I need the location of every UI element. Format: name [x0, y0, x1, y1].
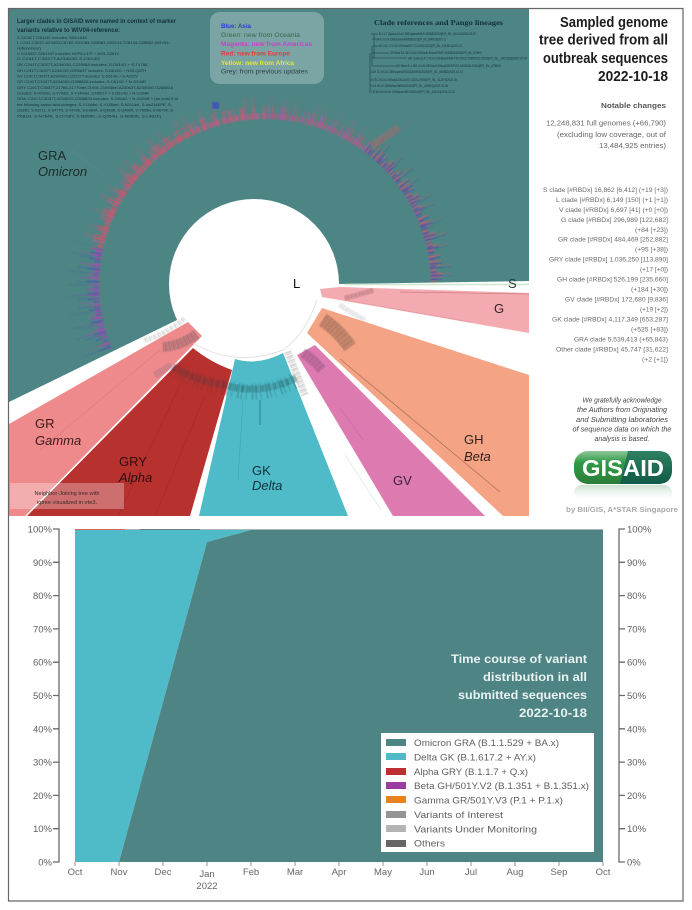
spikes: lower left blue and magenta [69, 247, 112, 356]
chart title [451, 652, 587, 720]
clade definitions text: the following amino acid changes: S-Y144del, S-Y145del, S-N211del, S-Ins214EPE, S- [17, 102, 173, 107]
right y axis: 30% [627, 758, 647, 769]
clade definitions text: variants relative to WIV04-reference: [17, 27, 120, 34]
clade counts list [543, 187, 668, 364]
clade definitions text: P681H, S-N764K, S-D796Y, S-N856K, S-Q954H, S-N969K, S-L981F) [17, 114, 162, 118]
sidebar title: outbreak sequences [543, 50, 668, 67]
geography colour legend: Green: new from Oceania [221, 32, 300, 39]
clade definitions text: GH C241T,C3037T,A23403G,G25563T includes: S-D614G + NS3-Q57H [17, 68, 146, 73]
right y axis: 10% [627, 824, 647, 835]
clade references mini tree: GH B.1 hCoV-19/England/20102000906/2020|EPI_ISL_660882|2020-10-19 [372, 70, 463, 74]
stacked area: Omicron GRA [119, 530, 603, 862]
clade definitions text: L C241,C3037,A23403,C8782,G11083,G25563,G26144,T28144,G28882 (WIV04- [17, 40, 171, 45]
GRY wedge [27, 348, 232, 516]
left y axis: 50% [33, 691, 53, 702]
legend: Delta GK (B.1.617.2 + AY.x) [414, 752, 536, 764]
x axis months: Nov [111, 867, 128, 878]
sidebar title: Sampled genome [560, 14, 668, 31]
clade references mini tree: GH Beta B.1.351 hCoV-19/South Africa/KRISP-EC-K005321/2020|EPI_ISL_678615 [396, 64, 501, 68]
wedge dark sequence fuzz [145, 290, 374, 395]
clade counts list: GV clade [#RBDx] 172,680 [9,836] [565, 296, 668, 304]
x axis months: Apr [332, 867, 346, 878]
label: GR Gamma: GR [35, 416, 54, 431]
x axis months: Dec [155, 867, 172, 878]
clade counts list: GRY clade [#RBDx] 1,036,250 [113,890] [549, 256, 668, 264]
clade counts list: (+84 [+23]) [635, 227, 668, 234]
left y axis [28, 524, 59, 868]
right y axis: 0% [627, 858, 641, 868]
clade counts list: (+184 [+30]) [631, 286, 668, 294]
GH wedge [307, 308, 529, 516]
right y axis: 100% [627, 524, 652, 536]
label: GRA Omicron: GRA [38, 148, 66, 163]
sidebar title [539, 14, 668, 85]
legend: Beta GH/501Y.V2 (B.1.351 + B.1.351.x) [414, 781, 589, 792]
left y axis: 100% [28, 524, 53, 536]
left y axis: 80% [33, 591, 53, 602]
x axis months: 2022 [196, 881, 218, 892]
clade definitions text: G C241T,C3037T,A23403G S-D614G [17, 56, 100, 61]
right y axis: 90% [627, 558, 647, 569]
thin top strips for remaining variants [75, 529, 603, 530]
clade counts list: GR clade [#RBDx] 484,469 [252,882] [558, 236, 668, 244]
S clade strip [345, 284, 529, 286]
left y axis: 40% [33, 724, 53, 735]
blue cluster at top [212, 102, 219, 109]
left y axis: 20% [33, 791, 53, 802]
clade definitions text [17, 18, 179, 118]
clade references mini tree: GRA.1 hCoV-19/Botswana/R40B58/2021|EPI_ISL_6640916|2021-11 [376, 38, 446, 42]
notable changes heading: Notable changes [601, 101, 666, 110]
wedge detail lines [40, 292, 529, 516]
spikes: right red and blue [364, 138, 453, 282]
left y axis: 90% [33, 558, 53, 569]
x axis months: Feb [243, 867, 259, 878]
label: GRY Alpha: Alpha [118, 470, 152, 485]
clade definitions text: G339D, S-S371L, S-S477N, S-T478K, S-E484A, S-Q493R, S-Q498R, S-Y505H, S-N679K, S- [17, 108, 175, 112]
right y axis: 20% [627, 791, 647, 802]
x axis months: May [374, 867, 392, 878]
G wedge [320, 287, 529, 333]
clade counts list: L clade [#RBDx] 6,149 [150] (+1 [+1]) [556, 197, 668, 204]
x axis months: Jan [199, 869, 215, 880]
right y axis: 40% [627, 724, 647, 735]
clade definitions text: GV C241T,C3037T,A23403G,C22227T includes: S-D614G + S-A222V [17, 74, 138, 78]
clade counts list: GK clade [#RBDx] 4,117,349 [653,287] [552, 316, 668, 324]
chart title: Time course of variant [451, 652, 587, 666]
legend: Variants Under Monitoring [414, 824, 537, 836]
clade references mini tree: V A hCoV-19/Wuhan/WH04/2020|EPI_ISL_406801|2020-01-05 [372, 84, 448, 88]
clade counts list: GRA clade 5,539,413 (+65,843) [574, 336, 668, 344]
clade counts list: (+95 [+38]) [635, 246, 668, 254]
geography colour legend: Blue: Asia [221, 23, 251, 30]
clade definitions text: GRY C241T,C3037T,21765-21770del,21991-21993del,A23063T,A23403G,G28882A [17, 85, 173, 90]
spikes: top red [188, 97, 266, 136]
label: L: L [293, 276, 300, 291]
clade definitions text: includes: S-H69del, S-V70del, S-Y144del, S-N501Y + S-D614G + N-G204R [17, 90, 149, 96]
chart title: submitted sequences [458, 688, 587, 702]
left y axis: 60% [33, 658, 53, 669]
sidebar title: 2022-10-18 [598, 68, 668, 85]
x axis months: Jun [419, 867, 435, 878]
clade counts list: (+17 [+0]) [640, 266, 668, 274]
legend: Variants of Interest [414, 810, 503, 821]
clade counts list: (+19 [+2]) [640, 306, 668, 314]
acknowledgement: We gratefully acknowledge [582, 396, 662, 404]
clade references mini tree: GR Gamma P.1 hCoV-19/Brazil/AM-FIOCRUZ-20890261/2020|EPI_ISL_1402366|2020-12-04 [408, 56, 527, 60]
GISAID logo: GISAID [582, 455, 664, 481]
legend: Omicron GRA (B.1.1.529 + BA.x) [414, 738, 559, 749]
GK wedge [199, 353, 348, 516]
stacked area: Delta GK [75, 530, 251, 862]
clade counts list: S clade [#RBDx] 16,862 [6,412] (+19 [+3]) [543, 187, 668, 194]
clade counts list: (+525 [+83]) [631, 326, 668, 334]
clade references mini tree [369, 19, 527, 94]
GRA Omicron teal background [9, 9, 529, 402]
GV wedge [297, 345, 485, 516]
clade references mini tree: G B.1 hCoV-19/Italy/LOM-ASST-CDG1/2020|EPI_ISL_412973|2020-02 [372, 78, 457, 82]
clade references mini tree: L B WIV04 hCoV-19/Wuhan/WIV04/2019|EPI_ISL_402124|2019-12-30 [371, 90, 455, 94]
right y axis: 70% [627, 624, 647, 635]
totals text: 13,484,925 entries) [599, 141, 666, 150]
label: GRA Omicron: Omicron [38, 164, 87, 179]
acknowledgement [572, 396, 672, 443]
right y axis [619, 524, 652, 868]
left y axis: 30% [33, 758, 53, 769]
clade definitions text: Larger clades in GISAID were named in context of marker [17, 18, 177, 25]
geography colour legend [210, 12, 324, 84]
clade references mini tree: GR Beta B.1.351 hCoV-19/South Africa/KRISP-K005325/2020|EPI_ISL_678597 [390, 51, 482, 55]
GRA tree radial spikes [69, 97, 453, 356]
clade counts list: G clade [#RBDx] 296,989 [122,682] [561, 217, 668, 224]
right y axis: 80% [627, 591, 647, 602]
spikes: upper right magenta [264, 97, 371, 152]
label: G: G [494, 301, 504, 316]
label: GV: GV [393, 473, 412, 488]
clade counts list: (+2 [+1]) [642, 356, 668, 364]
spike cluster at upper right [372, 128, 398, 146]
chart title: distribution in all [483, 670, 587, 684]
legend: Alpha GRY (B.1.1.7 + Q.x) [414, 767, 528, 778]
chart title: 2022-10-18 [519, 706, 587, 720]
legend: Others [414, 838, 445, 850]
x axis months: Aug [507, 867, 523, 878]
clade references mini tree: B.1.1.7 (Alpha) hCoV-19/England/MILK-9E05B3/2020|EPI_ISL_601443|2020-09-20 [379, 32, 476, 36]
acknowledgement: of sequence data on which the [572, 424, 672, 434]
totals text: (excluding low coverage, out of [557, 130, 666, 139]
sidebar title: tree derived from all [539, 32, 668, 48]
centre white circle [169, 199, 339, 369]
label: GH Beta: Beta [464, 449, 491, 464]
panel: phylogenetic tree [9, 9, 529, 516]
clade definitions text: GK C241T,C3037T,A23403G,C22995A includes: S-D614G + S-T478K [17, 62, 148, 67]
label: GK Delta: Delta [252, 478, 282, 493]
clade references mini tree: B.1.617.2 hCoV-19/India/GCT-GJ-0001/2021|EPI_ISL_1544014|2021-02 [380, 44, 462, 48]
label: GRY Alpha: GRY [119, 454, 147, 469]
geography colour legend: Yellow: new from Africa [221, 60, 294, 67]
geography colour legend: Red: new from Europe [221, 50, 290, 58]
note: tree method: Neighbor-Joining tree with [35, 491, 99, 497]
acknowledgement: analysis is based. [594, 434, 650, 443]
x axis months: Mar [287, 867, 303, 878]
panel: variant time course chart [28, 524, 652, 892]
geography colour legend: Magenta: new from Americas [221, 41, 312, 48]
label: GH Beta: GH [464, 432, 484, 447]
GISAID logo [574, 451, 672, 502]
clade counts list: V clade [#RBDx] 6,697 [41] (+0 [+0]) [559, 207, 668, 214]
clade counts list: GH clade [#RBDx] 526,199 [235,660] [557, 276, 668, 284]
x axis months [68, 862, 611, 892]
panel: notes sidebar [539, 14, 678, 514]
x axis months: Sep [551, 867, 567, 878]
clade counts list: Other clade [#RBDx] 45,747 [31,622] [556, 346, 668, 354]
note: tree method: iqtree visualized in ete3. [37, 500, 97, 506]
acknowledgement: and Submitting laboratories [576, 415, 668, 424]
x axis months: Oct [68, 867, 83, 878]
clade labels on wedges [35, 148, 517, 493]
geography colour legend: Grey: from previous updates [221, 68, 308, 76]
legend [381, 733, 594, 852]
totals text [546, 118, 666, 150]
clade definitions text: GR C241T,C3037T,A23403G,G28882A includes: S-D614G + N-G204R [17, 79, 146, 84]
acknowledgement: the Authors from Originating [577, 405, 667, 414]
credit line: by BII/GIS, A*STAR Singapore [566, 505, 678, 514]
clade definitions text: GRA: C241T,C3037T,A23403G,G28882A includes: S-D614G + N-G204R + (an least 6 of [17, 96, 179, 101]
label: S: S [508, 276, 517, 291]
x axis months: Oct [596, 867, 611, 878]
GR wedge [9, 322, 202, 516]
x axis months: Jul [465, 867, 477, 878]
clade definitions text: reference) [17, 46, 42, 50]
label: GK Delta: GK [252, 463, 271, 478]
left y axis: 70% [33, 624, 53, 635]
right y axis: 60% [627, 658, 647, 669]
label: GR Gamma: Gamma [35, 433, 81, 448]
clade references mini tree: Clade references and Pango lineages [374, 19, 503, 27]
totals text: 12,248,831 full genomes (+66,790) [546, 118, 666, 128]
spikes: left upper pink and red [84, 116, 194, 249]
clade definitions text: V G11083T,G26144T includes: NSP6-L37F + NS3-G251V [17, 51, 119, 56]
inner branch ring [100, 106, 430, 345]
left y axis: 0% [38, 858, 53, 868]
right y axis: 50% [627, 691, 647, 702]
note: tree method [10, 483, 124, 509]
left y axis: 10% [33, 824, 53, 835]
clade definitions text: S C8782T,T28144C includes: NS8-L84S [17, 35, 87, 40]
legend: Gamma GR/501Y.V3 (P.1 + P.1.x) [414, 796, 563, 806]
